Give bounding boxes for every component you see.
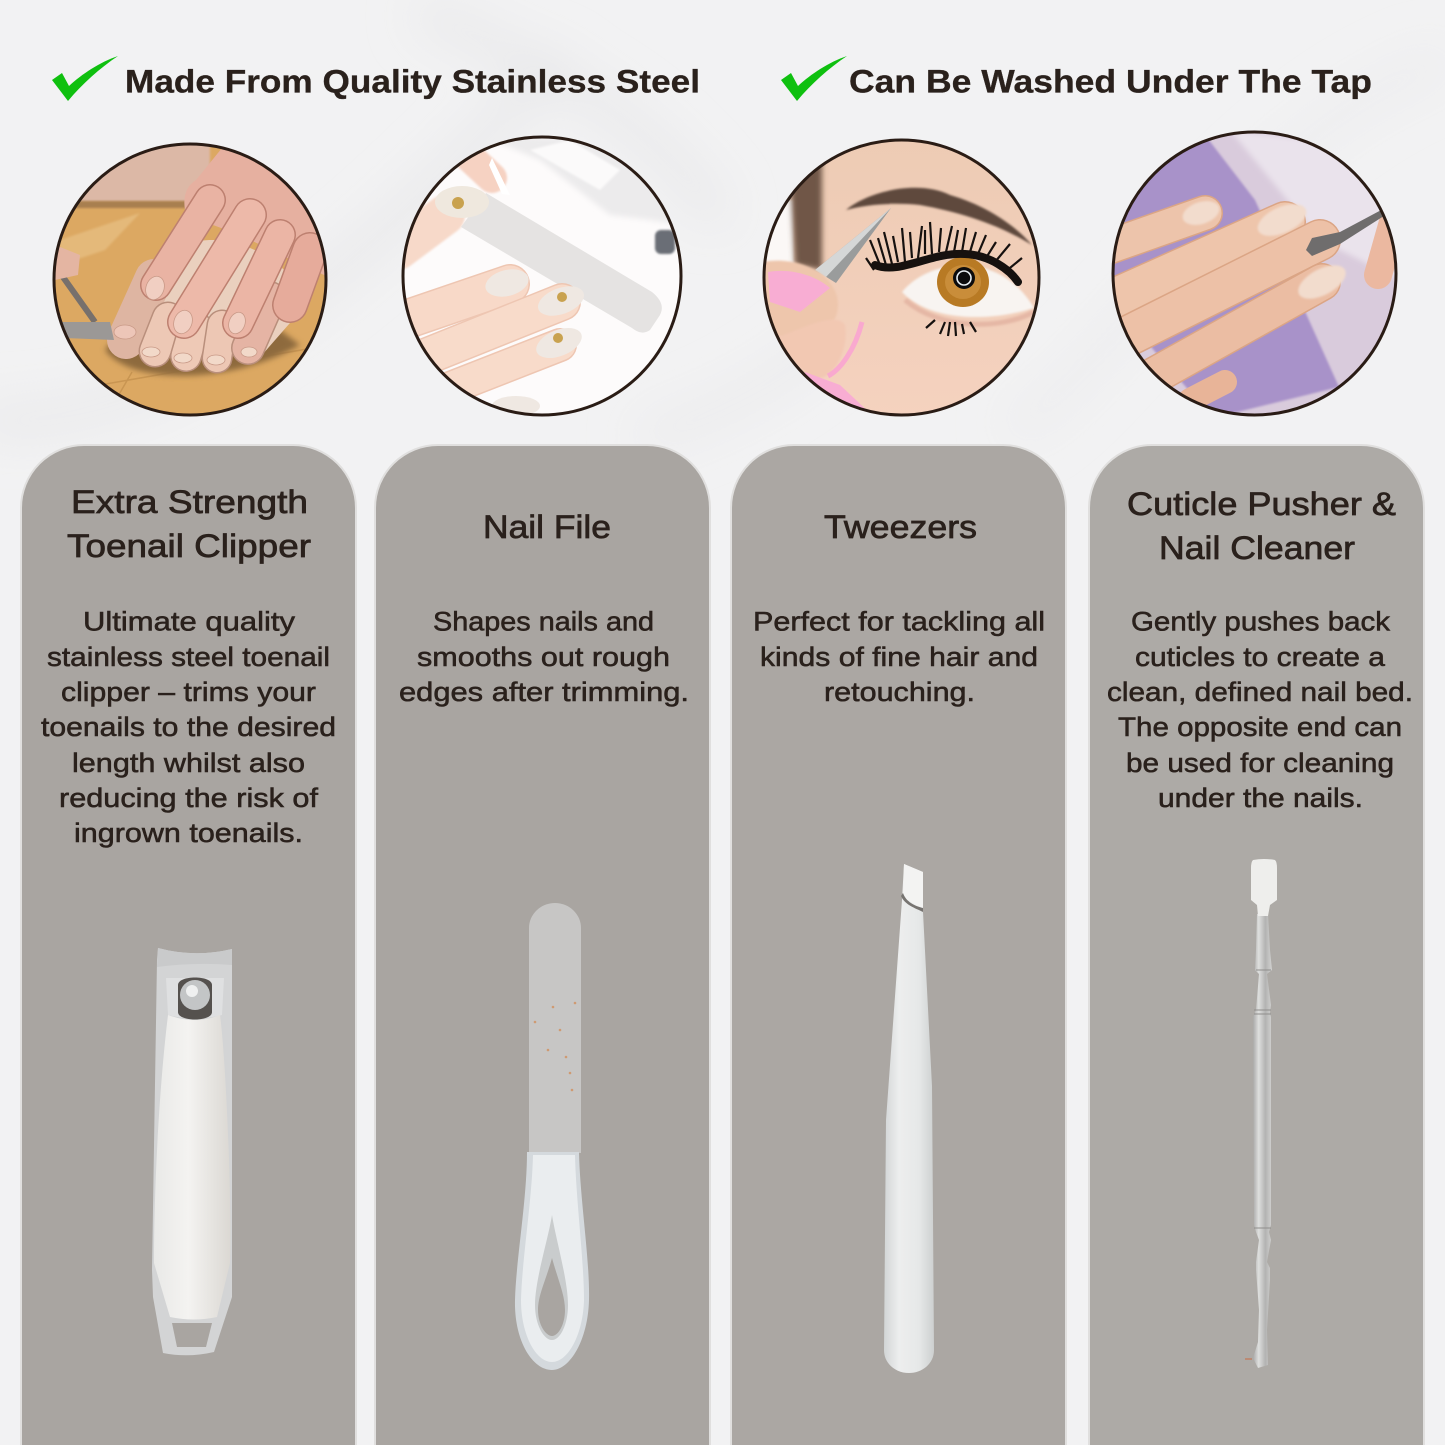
tool: tweezers — [884, 864, 934, 1373]
photo: tweezing eyebrow — [760, 135, 1045, 420]
panel description: length whilst also — [72, 748, 305, 778]
photo: clipping toenails — [50, 140, 335, 420]
photo: filing nails — [390, 130, 685, 420]
tool: cuticle pusher — [1245, 859, 1277, 1368]
panel description: cuticles to create a — [1135, 642, 1386, 672]
heading: stainless steel feature — [52, 56, 700, 101]
panel description: ingrown toenails. — [74, 818, 303, 848]
heading text: washable: Can Be Washed Under The Tap — [849, 64, 1372, 100]
panel title: Cuticle Pusher & — [1127, 486, 1396, 522]
panel title: Nail Cleaner — [1159, 530, 1355, 566]
heading: washable feature — [781, 56, 1372, 101]
panel description: The opposite end can — [1118, 712, 1402, 742]
panel description: clipper – trims your — [61, 677, 316, 707]
heading text: stainless steel: Made From Quality Stainless Steel — [125, 64, 700, 100]
panel description: Shapes nails and — [433, 606, 654, 636]
panel description: clean, defined nail bed. — [1107, 677, 1413, 707]
panel description: Perfect for tackling all — [753, 606, 1045, 636]
panel: nail file — [375, 445, 710, 1445]
panel description: kinds of fine hair and — [760, 642, 1038, 672]
tool: nail clipper — [152, 948, 232, 1355]
panel background — [731, 445, 1066, 1445]
panel title — [1127, 486, 1396, 566]
panel title — [67, 484, 311, 564]
icon: green check — [781, 56, 847, 101]
panel: cuticle pusher — [1089, 445, 1424, 1445]
panel: tweezers — [731, 445, 1066, 1445]
circle outline — [403, 137, 681, 415]
panel description: reducing the risk of — [59, 783, 319, 813]
panel title: Toenail Clipper — [67, 528, 311, 564]
panel description: smooths out rough — [417, 642, 670, 672]
panel description: stainless steel toenail — [47, 642, 330, 672]
panel background — [21, 445, 356, 1445]
panel background — [1089, 445, 1424, 1445]
panel description — [399, 606, 689, 707]
panel title: Tweezers — [824, 509, 977, 545]
panel title: Nail File — [483, 509, 611, 545]
panel title: Extra Strength — [71, 484, 308, 520]
panel description — [41, 606, 336, 848]
circle outline — [1113, 132, 1396, 415]
panel description: Gently pushes back — [1131, 606, 1391, 636]
panel description: toenails to the desired — [41, 712, 336, 742]
photo: cuticle pushing on towel — [1100, 128, 1400, 420]
circle outline — [54, 144, 326, 415]
tool: nail file — [515, 903, 589, 1370]
panel description: be used for cleaning — [1126, 748, 1394, 778]
panel description: retouching. — [824, 677, 975, 707]
panel description — [753, 606, 1045, 707]
panel description: edges after trimming. — [399, 677, 689, 707]
panel background — [375, 445, 710, 1445]
panel description: Ultimate quality — [83, 606, 296, 636]
icon: green check — [52, 56, 118, 101]
panel description: under the nails. — [1158, 783, 1363, 813]
circle outline — [764, 140, 1039, 415]
panel: toenail clipper — [21, 445, 356, 1445]
panel description — [1107, 606, 1413, 813]
